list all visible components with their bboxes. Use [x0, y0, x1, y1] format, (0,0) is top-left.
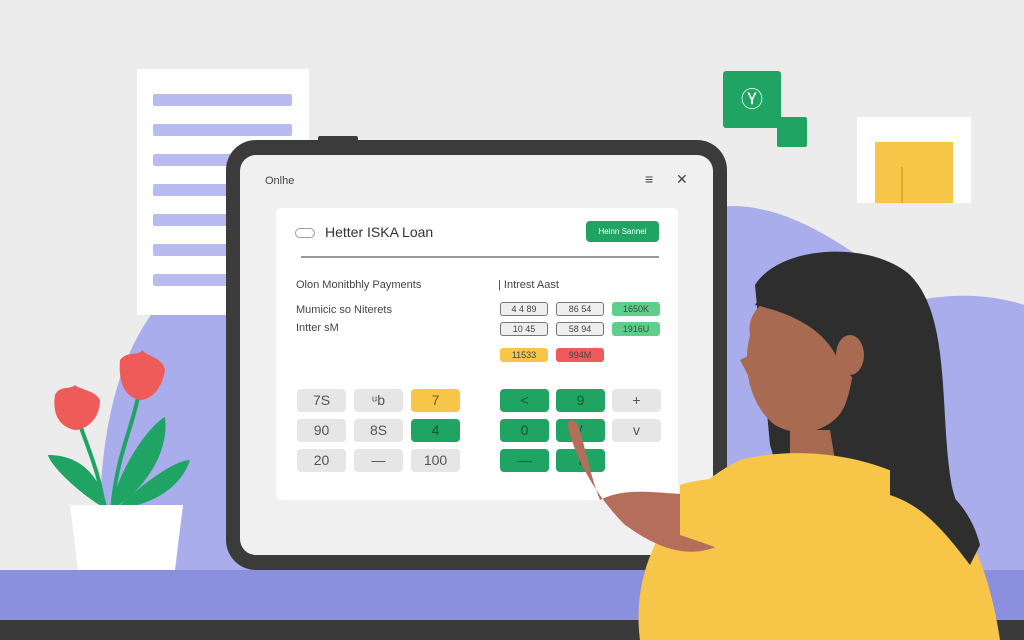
calculator card: 86 54 — [569, 304, 591, 314]
calculator card: Intter sM — [296, 322, 339, 334]
calculator card: 10 45 — [513, 324, 535, 334]
calculator card: 58 94 — [569, 324, 591, 334]
tablet: ≡ — [645, 171, 653, 187]
calculator card: 90 — [314, 422, 329, 438]
tags: 4 4 89 — [511, 304, 537, 314]
calculator card: 1916U — [623, 324, 649, 334]
screen header: Onlhe — [265, 175, 294, 187]
calculator card: 0 — [521, 422, 528, 438]
tablet: ✕ — [676, 171, 688, 187]
calculator card: Hetter ISKA Loan — [325, 224, 433, 240]
calculator card: 1650K — [623, 304, 649, 314]
calculator card: — — [372, 452, 386, 468]
calculator card: + — [632, 392, 641, 408]
calculator card: 11533 — [512, 350, 536, 360]
calculator card: — — [518, 452, 532, 468]
calculator card: 994M — [569, 350, 591, 360]
tags — [500, 302, 548, 316]
calculator card: ᵘb — [372, 392, 385, 408]
calculator card: I — [579, 452, 582, 468]
buttons: 7S — [313, 392, 330, 408]
calculator card: 7 — [432, 392, 439, 408]
calculator card: < — [520, 392, 529, 408]
desk — [0, 570, 1024, 620]
calculator card: v — [633, 422, 640, 438]
person — [568, 252, 1000, 640]
calculator card: Heinn Sannel — [598, 227, 647, 236]
calculator card: 9 — [577, 392, 584, 408]
calculator card — [276, 208, 678, 500]
plant — [48, 350, 190, 570]
icon: green square — [723, 71, 807, 147]
buttons — [297, 389, 346, 412]
calculator card: 8S — [370, 422, 387, 438]
calculator card: 20 — [314, 452, 329, 468]
calculator card: | Intrest Aast — [498, 279, 559, 291]
icon: green square: Ⓨ — [741, 87, 763, 112]
tablet — [226, 140, 727, 570]
icon: folder card — [857, 117, 971, 203]
calculator card: 100 — [424, 452, 447, 468]
document panel — [137, 69, 309, 315]
calculator card: 4 — [432, 422, 439, 438]
calculator card: Mumicic so Niterets — [296, 304, 392, 316]
calculator card: / — [579, 422, 582, 438]
calculator card: Olon Monitbhly Payments — [296, 279, 421, 291]
